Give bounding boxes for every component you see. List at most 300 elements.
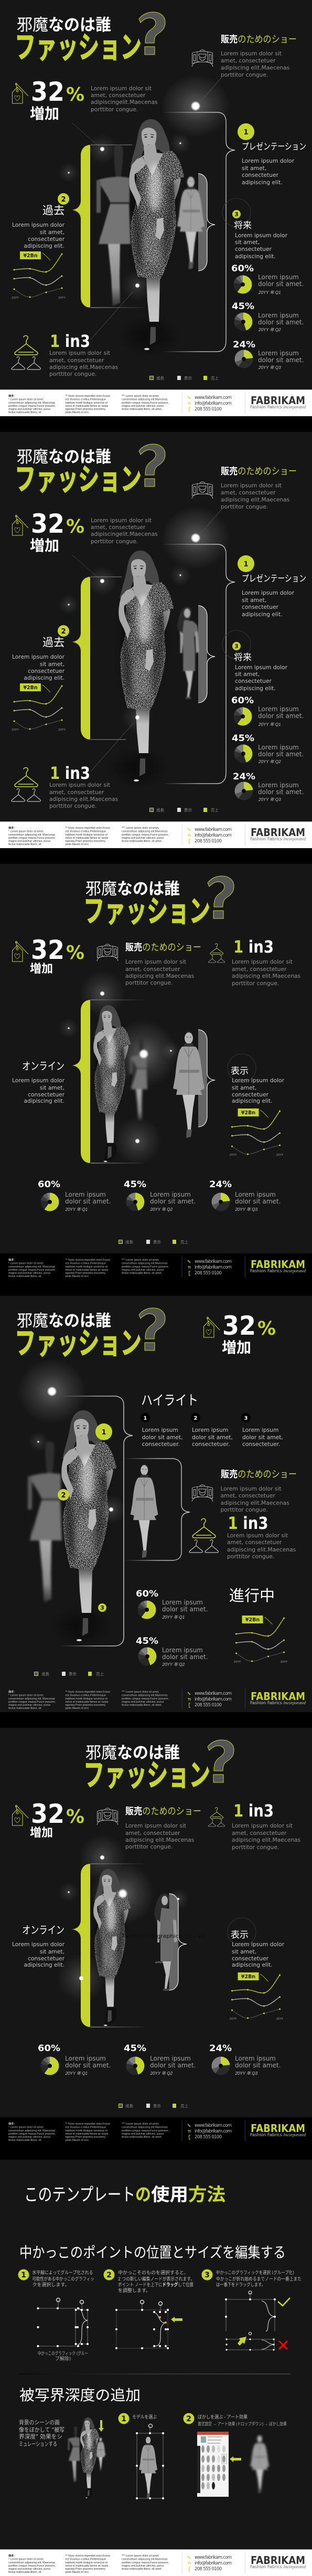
text block: depth of field: 像をぼかして "被写	[19, 2426, 64, 2433]
text block: show	[125, 958, 195, 986]
footer: * Lorem ipsum dolor sit amet,	[8, 1694, 44, 1697]
footer: 208 555 0100	[195, 2135, 222, 2140]
numbered item 3: Lorem ipsum	[242, 1427, 278, 1433]
footer: magna sed pulvinar ultricies, purus	[8, 408, 51, 411]
spotlights	[59, 970, 180, 1165]
text block: 1 in 3: adipiscing elit.Maecenas	[49, 364, 119, 371]
footer: porttitor congue massa.Fusce posuere,	[8, 405, 56, 408]
lights over models	[79, 1889, 179, 1981]
pie: 45%: dolor sit amet.	[150, 1198, 196, 1205]
icon: question mark	[139, 12, 165, 55]
footer: Fashion Fabrics Incorporated	[250, 405, 306, 409]
legend: 表示	[184, 807, 192, 812]
footer: ** Nunc viverra imperdiet enim.Fusce	[65, 2123, 110, 2126]
text block: 1 in 3: adipiscing elit.Maecenas	[49, 796, 119, 803]
text block: display: consectetuer	[232, 1091, 269, 1098]
line chart: 20YY	[12, 297, 19, 300]
footer: lectus malesuada libero, sit.	[8, 2571, 42, 2574]
photo: main model	[93, 1869, 131, 2026]
footer: ** Nunc viverra imperdiet enim.Fusce	[65, 827, 110, 830]
text block: online: adipiscing elit.	[24, 1097, 64, 1104]
footer: www.fabrikam.com	[195, 2123, 232, 2128]
footer: 208 555 0100	[195, 407, 222, 412]
footer: consectetuer adipiscing elit. Maecenas	[8, 402, 56, 405]
footer: pede.Mauris et orci.	[65, 843, 89, 846]
pie: 24%	[233, 340, 304, 370]
icon: price tag	[13, 942, 28, 962]
bracket: right large	[162, 112, 235, 352]
text block: increase	[91, 85, 158, 113]
title: how to use: の	[135, 2184, 151, 2205]
footer: egestas.Proin pharetra nonummy	[65, 408, 106, 411]
bracket: lime left	[72, 577, 126, 740]
footer: *** Lorem ipsum dolor sit amet,	[122, 395, 159, 398]
footer: lectus malesuada libero, sit.	[8, 2139, 42, 2142]
stat: 32% increase: 増加	[30, 537, 59, 554]
photo: trench coat model	[173, 1031, 205, 1138]
badge 2: 2	[61, 196, 66, 204]
spotlights	[17, 1359, 87, 1452]
pie: 45%: dolor sit amet.	[150, 2062, 196, 2069]
pie: 60%: 60%	[38, 2043, 60, 2054]
text block: presentation: sit amet,	[242, 165, 266, 172]
icon: hangers	[12, 767, 40, 801]
text block: presentation: consectetuer	[242, 172, 279, 178]
text block: future: consectetuer	[235, 678, 272, 684]
footer: 備考:	[8, 1258, 15, 1262]
footer: consectetuer adipiscing elit.Maecenas	[122, 1694, 168, 1697]
pie: 45%: Lorem ipsum	[258, 744, 299, 751]
line chart	[12, 251, 66, 300]
footer: ** Nunc viverra imperdiet enim.Fusce	[65, 395, 110, 398]
text block: past: Lorem ipsum dolor	[12, 653, 65, 660]
text block: show: adipiscing elit.Maecenas	[220, 1500, 289, 1506]
line chart	[230, 1972, 284, 2021]
line chart: 20YY	[230, 2018, 237, 2021]
caption: 中かっこのグラフィック (グルー	[38, 2350, 88, 2357]
text block: show: porttitor congue.	[125, 979, 173, 986]
footer: consectetuer adipiscing elit. Maecenas	[8, 2129, 56, 2132]
pie: 60%: 20YY 年 Q1	[65, 1207, 88, 1212]
divider	[18, 2373, 291, 2374]
text block: online: consectetuer	[28, 1955, 65, 1962]
step: select blur: 書式設定 → アート効果 (ドロップダウン) → ぼかし効果	[198, 2421, 287, 2426]
text block: show	[125, 1822, 195, 1850]
pie: 60%: Lorem ipsum	[65, 1191, 106, 1198]
line chart: 20YY	[280, 1661, 288, 1664]
pie: 45%: 45%	[124, 1179, 146, 1190]
title	[15, 16, 142, 65]
footer: * Lorem ipsum dolor sit amet,	[8, 2126, 44, 2129]
heading: past: 過去	[42, 205, 64, 217]
footer: *** Lorem ipsum dolor sit amet,	[122, 1691, 159, 1694]
footer: info@fabrikam.com	[195, 2561, 232, 2566]
footer: 備考:	[8, 394, 15, 398]
text block: 1 in 3: porttitor congue.	[49, 371, 96, 377]
badge 3: 3	[234, 211, 239, 218]
line chart	[12, 683, 66, 732]
shadow under model	[50, 1606, 113, 1648]
footer: Fashion Fabrics Incorporated	[250, 837, 306, 841]
footer: egestas.Proin pharetra nonummy	[65, 2136, 106, 2139]
legend: 成長	[125, 1239, 133, 1244]
caption	[38, 2350, 88, 2362]
footer: Fashion Fabrics Incorporated	[250, 1701, 306, 1705]
bracket: sales show	[124, 1459, 190, 1560]
spotlights	[57, 1834, 189, 2002]
footer: Fashion Fabrics Incorporated	[250, 2564, 306, 2569]
line chart	[230, 1108, 284, 1157]
footer: pede.Mauris et orci.	[65, 1275, 89, 1278]
footer: habitant morbi tristique senectus et	[65, 833, 108, 837]
line chart: ¥2Bn	[23, 685, 38, 691]
badge 1	[238, 555, 254, 572]
legend: 成長	[125, 2103, 133, 2108]
watermark: gettyimages	[155, 1961, 170, 1964]
pie: 45%: 45%	[124, 2043, 146, 2054]
pie: 24%	[233, 772, 304, 802]
icon: price tag	[13, 1806, 28, 1825]
text block: 1 in 3	[232, 1822, 301, 1851]
legend: 表示	[153, 1239, 161, 1244]
footer: habitant morbi tristique senectus et	[65, 1265, 108, 1269]
footer: 備考:	[8, 2121, 15, 2126]
badge 2	[58, 193, 69, 205]
legend	[150, 375, 219, 381]
text block: depth of field	[19, 2419, 64, 2447]
text block: display: sit amet,	[232, 1948, 256, 1955]
footer: habitant morbi tristique senectus et	[65, 402, 108, 405]
text block: future: sit amet,	[235, 671, 260, 678]
step 2: 中かっこそのものを選択すると、	[118, 2269, 189, 2276]
text block: show: Lorem ipsum dolor sit	[221, 50, 282, 57]
title	[15, 448, 142, 497]
stat: 32% increase: %	[257, 1318, 276, 1339]
text block: 1 in 3: Lorem ipsum dolor sit	[232, 958, 293, 965]
footer: lectus malesuada libero, sit.	[8, 411, 42, 414]
photo: main model	[129, 119, 184, 351]
footer: est.Vivamus a tellus.Pellentesque	[65, 1694, 106, 1697]
spotlight: left small lights	[59, 133, 191, 183]
heading: past: 過去	[42, 637, 64, 649]
legend: 売上	[180, 1239, 188, 1244]
stat: 1 in 3: 1 in3	[228, 1513, 268, 1533]
line chart: 20YY	[234, 1661, 241, 1664]
icon: question mark	[208, 1740, 234, 1782]
spotlight: on model	[96, 1495, 126, 1524]
pie: 24%: dolor sit amet.	[258, 356, 304, 364]
footer: netus et malesuada fames ac turpis	[65, 1269, 109, 1272]
step 3: は一番下をドラッグします。	[216, 2282, 265, 2288]
pie: 45%: dolor sit amet.	[258, 751, 304, 758]
footer: *** Lorem ipsum dolor sit amet,	[122, 1259, 159, 1262]
footer: egestas.Proin pharetra nonummy	[65, 2568, 106, 2571]
spotlight: top right	[161, 75, 230, 138]
text block: 1 in 3: Lorem ipsum dolor sit	[227, 1532, 288, 1539]
step: select blur	[184, 2413, 287, 2426]
icon: VR headset	[192, 1485, 213, 1502]
pie: 45%: 20YY 年 Q2	[258, 759, 281, 764]
pie: 60%	[231, 695, 304, 727]
text block: presentation: adipiscing elit.	[242, 179, 283, 186]
panel: slide 3	[0, 864, 312, 1296]
heading: show: 販売のためのショー	[221, 466, 297, 477]
line chart	[234, 1616, 288, 1664]
leader line	[72, 123, 99, 146]
pie: 24%	[209, 2043, 281, 2076]
footer: magna sed pulvinar ultricies, purus	[122, 2132, 164, 2136]
text block: depth of field: ミュレーションする	[19, 2441, 57, 2447]
footer: pede.Mauris et orci.	[65, 411, 89, 414]
watermark	[122, 1934, 205, 1964]
legend: 売上	[96, 1671, 104, 1676]
footer: FABRIKAM	[251, 1690, 305, 1703]
footer: FABRIKAM	[251, 2554, 305, 2567]
footer: Fashion Fabrics Incorporated	[250, 1269, 306, 1273]
stat: 32% increase	[30, 77, 84, 122]
heading: show: 販売のためのショー	[221, 1469, 297, 1480]
text block: presentation: adipiscing elit.	[242, 611, 283, 618]
pie: 60%: Lorem ipsum	[258, 273, 299, 281]
text block: future: adipiscing elit.	[235, 685, 276, 692]
step 1	[18, 2269, 94, 2288]
text block: display: Lorem ipsum dolor	[232, 1077, 285, 1084]
panel: slide 1	[0, 0, 312, 416]
stat: 32% increase: 32	[31, 1799, 64, 1829]
numbered item 2: dolor sit amet,	[192, 1434, 233, 1441]
text block: show: adipiscing elit.Maecenas	[221, 64, 290, 71]
text block: 1 in 3	[232, 958, 301, 987]
stat: 32% increase: %	[66, 84, 84, 105]
bracket: gray behind model	[198, 1030, 215, 1127]
photo: main model	[61, 1410, 116, 1642]
icon: question mark	[139, 444, 165, 487]
footer: lectus malesuada libero, sit amet.	[122, 2136, 162, 2139]
icon: VR headset	[192, 482, 213, 499]
watermark: Fashion Infographics_SB - v3	[122, 1934, 205, 1939]
badge 1: 1	[243, 561, 249, 568]
text block: 1 in 3: porttitor congue.	[227, 1553, 274, 1560]
heading: in progress: 進行中	[229, 1587, 275, 1604]
text block: display: Lorem ipsum dolor	[232, 1941, 285, 1948]
text block: increase: Lorem ipsum dolor sit	[91, 517, 152, 524]
badge 1	[238, 123, 254, 140]
bracket: gray behind model	[198, 606, 215, 703]
pie: 60%: dolor sit amet.	[258, 280, 304, 288]
badge 1: 1	[243, 129, 249, 136]
pie: 45%: 20YY 年 Q2	[150, 1207, 173, 1212]
title: 邪魔なのは誰	[17, 1312, 111, 1331]
text block: past: Lorem ipsum dolor	[12, 221, 65, 228]
numbered item 2: consectetuer.	[192, 1441, 230, 1448]
badge 1	[95, 1423, 112, 1440]
photo: composite models	[68, 2417, 105, 2498]
heading: highlights: ハイライト	[141, 1392, 198, 1408]
footer: porttitor congue massa.Fusce posuere,	[122, 402, 169, 405]
photo: dress model	[154, 1893, 177, 1991]
heading: display: 表示	[231, 1930, 249, 1940]
pie: 45%	[232, 301, 304, 332]
text block: increase	[91, 517, 158, 545]
bracket: lime left	[72, 1000, 144, 1163]
bracket: lime left	[72, 145, 144, 308]
pie: 45%: dolor sit amet.	[162, 1653, 208, 1661]
text block: past: sit amet,	[40, 229, 64, 236]
footer: habitant morbi tristique senectus et	[65, 2129, 108, 2132]
heading: display	[228, 1054, 256, 1082]
badge 3: 3	[234, 643, 239, 650]
footer: consectetuer adipiscing elit. Maecenas	[8, 833, 56, 837]
step 3: 中かっこのグラフィックを選択 (グループ化)	[216, 2269, 294, 2276]
pie: 60%: dolor sit amet.	[65, 2062, 111, 2069]
diagram 2	[115, 2300, 182, 2349]
photo: selected model	[136, 2424, 164, 2499]
heading: depth of field: 被写界深度の追加	[19, 2387, 141, 2403]
bracket: right large	[162, 544, 235, 784]
text block: depth of field: 界深度" 効果をシ	[19, 2433, 62, 2440]
text block: 1 in 3: porttitor congue.	[232, 980, 279, 987]
footer: Fashion Fabrics Incorporated	[250, 2132, 306, 2137]
footer	[0, 2117, 312, 2160]
footer: consectetuer adipiscing elit. Maecenas	[8, 2561, 56, 2564]
numbered item 1: Lorem ipsum	[142, 1427, 178, 1433]
line chart: ¥2Bn	[241, 1110, 255, 1116]
footer	[8, 1688, 306, 1710]
footer: 208 555 0100	[195, 1703, 222, 1708]
footer: ** Nunc viverra imperdiet enim.Fusce	[65, 1691, 110, 1694]
text block: 1 in 3: porttitor congue.	[49, 803, 96, 809]
title: how to use: 方法	[188, 2184, 225, 2205]
footer: ** Nunc viverra imperdiet enim.Fusce	[65, 2554, 110, 2558]
icon: price tag	[13, 83, 28, 103]
badge 3	[222, 630, 251, 659]
title: ファッション	[15, 29, 142, 65]
footer: info@fabrikam.com	[195, 401, 232, 406]
pie: 60%: Lorem ipsum	[258, 705, 299, 713]
title: 邪魔なのは誰	[17, 16, 111, 35]
footer: netus et malesuada fames ac turpis	[65, 405, 109, 408]
footer: est.Vivamus a tellus.Pellentesque	[65, 2126, 106, 2129]
icon: VR headset	[192, 50, 213, 67]
badge 3	[222, 198, 251, 227]
text block: 1 in 3: amet, consectetuer	[49, 789, 104, 796]
legend	[150, 807, 219, 812]
footer: * Lorem ipsum dolor sit amet,	[8, 398, 44, 401]
legend: 成長	[41, 1671, 49, 1676]
text block: online: adipiscing elit.	[24, 1961, 64, 1968]
stat: 32% increase	[30, 1799, 84, 1839]
numbered item 1: dolor sit amet,	[142, 1434, 182, 1441]
stat: 32% increase: 増加	[222, 1339, 251, 1356]
step 1: 水平線によってグループ化される	[33, 2269, 93, 2276]
text block: past	[12, 653, 65, 681]
footer: info@fabrikam.com	[195, 1697, 232, 1702]
title: ファッション	[15, 1325, 142, 1361]
text block: show: Lorem ipsum dolor sit	[125, 1822, 186, 1829]
stat: 32% increase	[30, 509, 84, 554]
pie: 60%: 60%	[231, 263, 254, 274]
diagram 3	[225, 2291, 290, 2351]
footer: porttitor congue massa.Fusce posuere,	[8, 1269, 56, 1272]
pie: 60%	[38, 1179, 111, 1212]
text block: increase: amet, consectetuer	[91, 524, 146, 531]
footer: www.fabrikam.com	[195, 395, 232, 400]
stat: 1 in 3: 1 in3	[233, 1801, 274, 1821]
icon: question mark	[208, 876, 234, 919]
text block: 1 in 3	[49, 782, 119, 809]
text block: 1 in 3: amet, consectetuer	[49, 357, 104, 364]
title	[15, 1312, 142, 1361]
footer	[0, 821, 312, 848]
footer: consectetuer adipiscing elit.Maecenas	[122, 830, 168, 833]
footer: magna sed pulvinar ultricies, purus	[122, 2564, 164, 2568]
footer: * Lorem ipsum dolor sit amet,	[8, 2558, 44, 2561]
footer: consectetuer adipiscing elit. Maecenas	[8, 1265, 56, 1269]
text block: presentation	[242, 157, 295, 186]
pie: 24%: Lorem ipsum	[235, 1191, 276, 1198]
bracket: highlights	[60, 1396, 133, 1646]
arrow: down	[99, 2420, 104, 2432]
footer: magna sed pulvinar ultricies, purus	[8, 2568, 51, 2571]
text block: online: Lorem ipsum dolor	[12, 1941, 65, 1948]
pie: 24%: 24%	[209, 2043, 232, 2054]
heading: show: 販売のためのショー	[125, 942, 201, 953]
text block: display: adipiscing elit.	[232, 1097, 273, 1104]
photo: trench coat model	[131, 1464, 158, 1558]
text block: display: adipiscing elit.	[232, 1961, 273, 1968]
text block: presentation: sit amet,	[242, 597, 266, 604]
shadow under model	[118, 315, 181, 357]
pie: 45%: 45%	[136, 1636, 158, 1646]
text block: future: Lorem ipsum dolor	[235, 664, 288, 671]
stat: 32% increase: %	[66, 1806, 84, 1828]
pie: 24%: Lorem ipsum	[258, 782, 299, 789]
title: 邪魔なのは誰	[85, 1744, 180, 1762]
pie: 45%: Lorem ipsum	[150, 1191, 191, 1198]
footer: netus et malesuada fames ac turpis	[65, 1701, 109, 1704]
pie: 45%	[124, 1179, 196, 1212]
footer: 備考:	[8, 826, 15, 830]
text block: past	[12, 221, 65, 249]
icon: hangers	[12, 335, 40, 369]
stat: 32% increase: 32	[222, 1311, 256, 1341]
footer: magna sed pulvinar ultricies, purus	[8, 840, 51, 843]
footer: magna sed pulvinar ultricies, purus	[122, 1269, 164, 1272]
stat: 1 in 3: 1 in3	[50, 763, 90, 783]
pie: 60%: Lorem ipsum	[65, 2055, 106, 2062]
stat: 1 in 3: 1 in3	[50, 331, 90, 351]
footer: magna sed pulvinar ultricies, purus	[8, 1704, 51, 1707]
text block: show: amet, consectetuer	[125, 1830, 180, 1836]
footer: netus et malesuada fames ac turpis	[65, 2564, 109, 2568]
line chart: ¥2Bn	[241, 1974, 255, 1980]
footer: 208 555 0100	[195, 2567, 222, 2572]
pie: 60%: 20YY 年 Q1	[65, 2071, 88, 2076]
footer: *** Lorem ipsum dolor sit amet,	[122, 2123, 159, 2126]
spotlight: left small lights	[59, 565, 191, 615]
footer: consectetuer adipiscing elit. Maecenas	[8, 1697, 56, 1701]
pie: 60%: 20YY 年 Q1	[258, 722, 281, 727]
footer: FABRIKAM	[251, 394, 305, 407]
step 3: 3	[205, 2271, 210, 2279]
line chart: 20YY	[276, 1154, 284, 1157]
footer: lectus malesuada libero, sit.	[8, 1707, 42, 1710]
text block: past: consectetuer	[28, 668, 65, 674]
icon: hangers	[209, 944, 225, 963]
legend: 売上	[180, 2103, 188, 2108]
pie: 24%: Lorem ipsum	[258, 350, 299, 357]
footer: ** Nunc viverra imperdiet enim.Fusce	[65, 1259, 110, 1262]
